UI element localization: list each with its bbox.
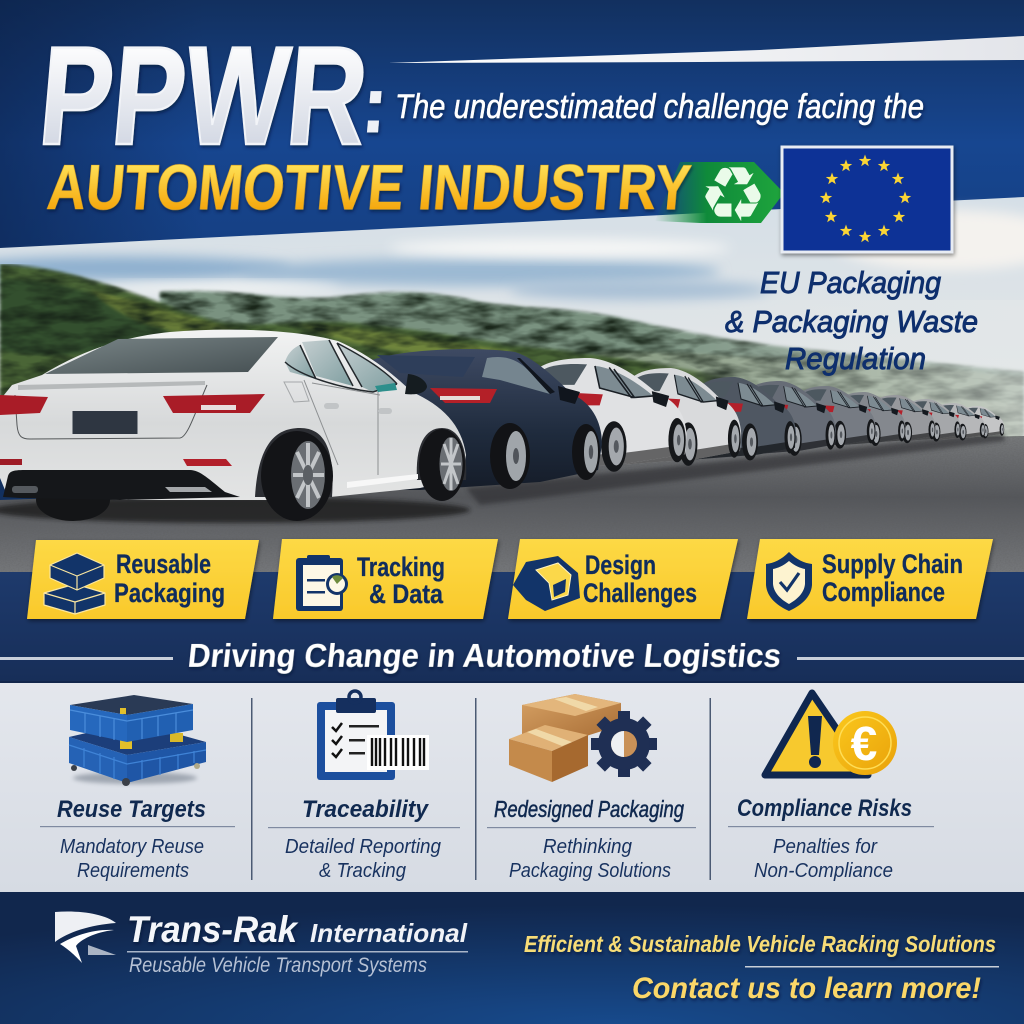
panel: design challenges [508, 539, 738, 619]
description: Mandatory Reuse [60, 836, 204, 858]
heading: Traceability [302, 796, 430, 823]
description: Detailed Reporting [285, 836, 441, 858]
icon: shield with check [766, 552, 812, 611]
label: Challenges [583, 578, 697, 608]
label: Supply Chain [822, 549, 963, 579]
column: traceability [268, 691, 460, 882]
description: & Tracking [319, 860, 406, 882]
icon: EU flag [782, 147, 952, 252]
label: Packaging [114, 578, 225, 608]
title colon: : [359, 59, 391, 149]
header title [34, 17, 924, 174]
distant haze [640, 300, 1024, 445]
header background [0, 0, 1024, 260]
logo: Trans-Rak International: International [310, 918, 468, 948]
company name: Trans-Rak [127, 909, 299, 950]
text block: EU regulation name: EU Packaging [760, 265, 941, 300]
panel: reusable packaging [27, 540, 259, 619]
panel: supply chain compliance [747, 539, 993, 619]
icon: open box [513, 556, 580, 611]
shadow under the car row [466, 432, 1005, 505]
far cars in the row [527, 358, 1004, 472]
label: Tracking [357, 552, 445, 582]
text block: EU regulation name: Regulation [785, 341, 926, 376]
icon: clipboard with chart [296, 555, 348, 611]
description: Packaging Solutions [509, 860, 671, 882]
heading: driving change [0, 638, 1024, 675]
heading: Reuse Targets [57, 796, 206, 823]
footer [0, 892, 1024, 1024]
label: Design [585, 550, 656, 580]
main white car [0, 330, 470, 523]
recycling arrow badge [655, 150, 784, 239]
hero photo: road, hills and rows of cars [0, 197, 1024, 572]
text block: EU regulation name: & Packaging Waste [725, 304, 978, 339]
sky [0, 197, 1024, 460]
panel: tracking and data [273, 539, 498, 619]
label [583, 550, 697, 608]
dark car [370, 349, 602, 490]
label [357, 552, 445, 609]
column: compliance risks [728, 693, 934, 882]
logo: Trans-Rak International [55, 909, 468, 977]
label: Reusable [116, 549, 211, 579]
label: Compliance [822, 577, 945, 607]
label: & Data [369, 579, 444, 609]
distant hills [0, 264, 1024, 450]
description: Non-Compliance [754, 860, 893, 882]
euro sign: € [851, 718, 877, 771]
description [285, 836, 441, 882]
description: Rethinking [543, 836, 632, 858]
description: Penalties for [773, 836, 878, 858]
heading: driving change: Driving Change in Automotive Logistics [186, 638, 783, 675]
icon: boxes and gear [509, 694, 657, 782]
description [754, 836, 893, 882]
icon: logo swoosh [55, 911, 116, 963]
call to action: Contact us to learn more! [632, 972, 981, 1005]
label [822, 549, 963, 607]
gear [591, 711, 657, 777]
barcode [367, 735, 429, 770]
icon: recycle symbol: ♻ [699, 150, 767, 239]
icon: stacked blue crates [69, 695, 206, 786]
description [509, 836, 671, 882]
road surface [0, 436, 1024, 572]
white swoosh accent [388, 36, 1024, 63]
text block: EU regulation name [725, 265, 978, 376]
heading: automotive industry: AUTOMOTIVE INDUSTRY [44, 151, 694, 223]
icon: clipboard and barcode [317, 691, 429, 780]
icon: warning triangle and euro coin [765, 693, 897, 775]
near tree line [0, 264, 720, 450]
description [60, 836, 204, 882]
tagline: Reusable Vehicle Transport Systems [129, 954, 427, 977]
icon: stacked boxes [44, 553, 105, 614]
subtitle line: The underestimated challenge facing the [395, 88, 924, 126]
heading: Redesigned Packaging [494, 796, 684, 822]
panel: four benefit columns [0, 681, 1024, 892]
call to action [524, 931, 999, 1005]
navy band [0, 572, 1024, 682]
column: reuse targets [40, 695, 235, 882]
heading: Compliance Risks [737, 795, 912, 822]
column: redesigned packaging [487, 694, 696, 882]
description: Requirements [77, 860, 189, 882]
title: PPWR: PPWR [34, 17, 373, 174]
label [114, 549, 225, 608]
